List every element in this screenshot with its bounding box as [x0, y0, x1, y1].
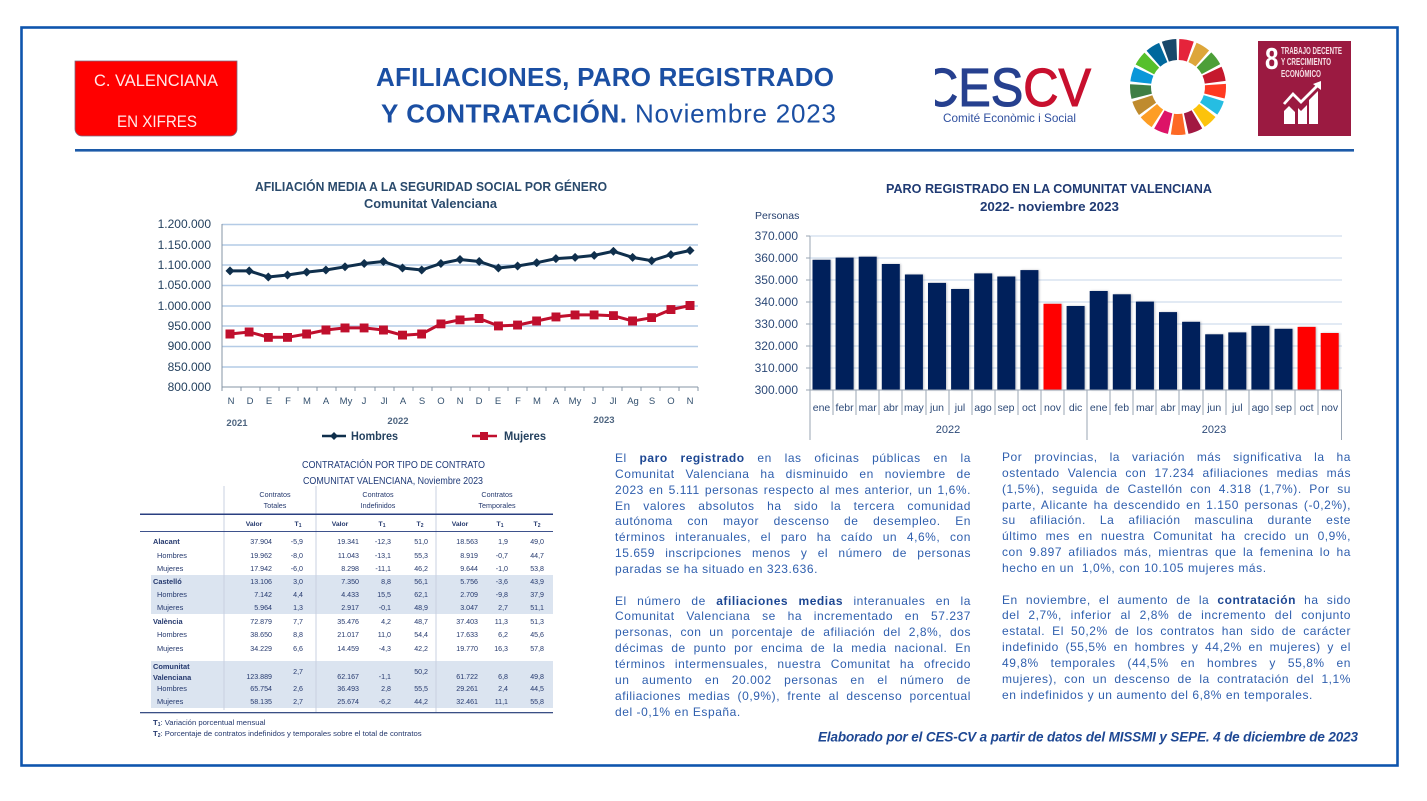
table values: 123.889 [246, 673, 272, 681]
year labels [226, 415, 615, 429]
legend [322, 429, 546, 443]
shaded rows [151, 575, 553, 614]
y axis labels: 850.000 [168, 360, 211, 374]
x axis labels: O [437, 396, 445, 407]
x axis labels: abr [883, 402, 899, 414]
row labels: Hombres [157, 630, 187, 639]
x axis labels: N [457, 396, 464, 407]
text block: paro y afiliaciones: El número de afiliaciones medias interanuales en la [615, 594, 971, 608]
row labels: Hombres [157, 684, 187, 693]
table values: 2,6 [293, 685, 303, 693]
y axis labels: 350.000 [755, 273, 798, 287]
column headers: Totales [264, 501, 287, 510]
table: contratación: T [497, 521, 501, 528]
table values: 44,2 [414, 698, 428, 706]
x axis labels: jul [1231, 402, 1243, 414]
row labels [153, 537, 192, 706]
badge: C. Valenciana en xifres: C. VALENCIANA [94, 71, 219, 90]
table values: 2,7 [293, 698, 303, 706]
bars [812, 257, 1339, 390]
x axis labels: My [569, 396, 582, 407]
logo: CES-CV: CESCV [923, 58, 1091, 118]
text block: provincias y contratación: su afiliación. La afiliación masculina durante este [1002, 513, 1351, 527]
table values: -0,7 [496, 552, 508, 560]
table values: -13,1 [375, 552, 391, 560]
icon: SDG 8 tile: ECONÓMICO [1281, 67, 1321, 80]
table values: 61.722 [456, 673, 478, 681]
x axis labels: M [303, 396, 311, 407]
x axis labels: My [340, 396, 353, 407]
table values: -1,0 [496, 565, 508, 573]
x axis labels: sep [998, 402, 1015, 414]
header divider [75, 149, 1354, 152]
y axis labels: 310.000 [755, 361, 798, 375]
text block: provincias y contratación: en indefinidos y un aumento del 6,8% en temporales. [1002, 688, 1313, 702]
table values: -3,6 [496, 578, 508, 586]
title: AFILIACIONES, PARO REGISTRADO [376, 62, 834, 92]
x axis labels: D [476, 396, 483, 407]
table values: 54,4 [414, 631, 428, 639]
x axis labels: F [285, 396, 291, 407]
table: contratación: 1 [383, 523, 386, 529]
text block: paro y afiliaciones: En valores absolutos ha sido la tercera comunidad [615, 499, 971, 513]
table values: 14.459 [337, 645, 359, 653]
table values: -6,2 [379, 698, 391, 706]
table values: 36.493 [337, 685, 359, 693]
text block: paro y afiliaciones: personas, con un porcentaje de afiliación del 2,8%, dos [615, 625, 971, 639]
table values: 8.919 [460, 552, 478, 560]
icon: SDG wheel [1125, 34, 1231, 140]
series: Mujeres [230, 306, 690, 337]
table values: 46,2 [414, 565, 428, 573]
x axis labels: M [533, 396, 541, 407]
column headers [259, 490, 516, 510]
table values: 25.674 [337, 698, 359, 706]
row labels: Hombres [157, 590, 187, 599]
text block: provincias y contratación: ostentado Valencia con 17.234 afiliaciones medias más [1002, 466, 1351, 480]
table values: 53,8 [530, 565, 544, 573]
row labels: Alacant [153, 537, 180, 546]
table values: 4.433 [341, 591, 359, 599]
table values: 48,9 [414, 604, 428, 612]
table values: 55,3 [414, 552, 428, 560]
chart title: PARO REGISTRADO EN LA COMUNITAT VALENCIANA [886, 181, 1213, 196]
x axis labels: F [515, 396, 521, 407]
x axis labels: nov [1321, 402, 1339, 414]
x axis labels: J [362, 396, 367, 407]
table footnotes [153, 718, 422, 739]
table values: 15,5 [377, 591, 391, 599]
text block: provincias y contratación: último mes en nuestra Comunitat ha crecido un 0,9%, [1002, 529, 1351, 543]
x axis labels: sep [1275, 402, 1292, 414]
table values: 6,6 [293, 645, 303, 653]
table values: 57,8 [530, 645, 544, 653]
table values [246, 538, 544, 706]
table values: 3,0 [293, 578, 303, 586]
table values: 35.476 [337, 618, 359, 626]
x axis labels: nov [1044, 402, 1062, 414]
text block: paro y afiliaciones: 2023 en 5.111 personas respecto al mes anterior, un 1,6%. [615, 483, 971, 497]
table values: 8,8 [381, 578, 391, 586]
x axis labels: Ag [627, 396, 639, 407]
table: contratación: Valor [452, 521, 469, 528]
column headers: Contratos [362, 490, 394, 499]
table footnotes: : Porcentaje de contratos indefinidos y temporales sobre el total de contratos [160, 729, 422, 738]
table values: -9,8 [496, 591, 508, 599]
table values: 51,0 [414, 538, 428, 546]
x axis labels: jul [954, 402, 965, 414]
row labels: Hombres [157, 551, 187, 560]
x axis labels: mar [859, 402, 877, 414]
title: Noviembre 2023 [635, 98, 836, 128]
table values: 11,0 [378, 631, 391, 639]
legend: Mujeres [504, 429, 546, 443]
text block: paro y afiliaciones [615, 451, 971, 718]
year labels: 2023 [1202, 424, 1226, 436]
logo: CES-CV: Comité Econòmic i Social [943, 111, 1076, 125]
table values: -6,0 [291, 565, 303, 573]
table footnotes: T [153, 729, 161, 739]
table values: 48,7 [414, 618, 428, 626]
table: contratación: T [534, 521, 538, 528]
text block: provincias y contratación: estatal. El 50,2% de los contratos han sido de carácter [1002, 624, 1351, 638]
y axis labels: 950.000 [168, 319, 211, 333]
column headers: Contratos [259, 490, 291, 499]
x axis labels: O [667, 396, 675, 407]
y axis labels: 330.000 [755, 317, 798, 331]
table values: 49,8 [530, 673, 544, 681]
table values: 17.942 [250, 565, 272, 573]
chart title: AFILIACIÓN MEDIA A LA SEGURIDAD SOCIAL POR GÉNERO [255, 179, 607, 194]
table: contratación: 2 [538, 523, 541, 529]
table values: -11,1 [375, 565, 391, 573]
table values: 38.650 [250, 631, 272, 639]
table values: 5.756 [460, 578, 478, 586]
x axis labels: oct [1300, 402, 1314, 414]
year labels [936, 424, 1226, 436]
chart title: 2022- noviembre 2023 [980, 199, 1119, 214]
table values: 56,1 [414, 578, 428, 586]
x axis labels: dic [1069, 402, 1082, 414]
table values: 7.350 [341, 578, 359, 586]
table values: 2.917 [341, 604, 359, 612]
x axis labels: abr [1160, 402, 1176, 414]
table values: -5,9 [291, 538, 303, 546]
y axis labels: 320.000 [755, 339, 798, 353]
table values: 44,5 [530, 685, 544, 693]
table values: 2.709 [460, 591, 478, 599]
table footnotes: 2 [158, 733, 161, 739]
y axis labels: 1.000.000 [158, 299, 211, 313]
text block: paro y afiliaciones: términos intermensuales, nuestra Comunitat ha ofrecido [615, 657, 971, 671]
text block: provincias y contratación: (1,5%), seguida de Castellón con 4.318 (1,7%). Por su [1002, 482, 1351, 496]
table: contratación [140, 458, 553, 739]
table values: 21.017 [337, 631, 359, 639]
x axis labels: oct [1022, 402, 1036, 414]
table values: -4,3 [379, 645, 391, 653]
x axis labels: may [1181, 402, 1202, 414]
year labels: 2023 [593, 415, 615, 426]
table values: 2,4 [498, 685, 508, 693]
text block: paro y afiliaciones: del -0,1% en España. [615, 704, 741, 718]
text block: provincias y contratación [1002, 450, 1351, 702]
text block: paro y afiliaciones: décimas de punto por encima de la media nacional. En [615, 641, 971, 655]
table values: 34.229 [250, 645, 272, 653]
y axis labels: 340.000 [755, 295, 798, 309]
x axis labels: N [687, 396, 694, 407]
table values: 50,2 [414, 668, 428, 676]
legend: Hombres [351, 429, 398, 443]
table values: 62.167 [337, 673, 359, 681]
y axis labels: 300.000 [755, 383, 798, 397]
year labels: 2022 [936, 424, 960, 436]
column headers: Indefinidos [361, 501, 396, 510]
table values: 4,4 [293, 591, 303, 599]
table values: 19.962 [250, 552, 272, 560]
table values: 11,3 [495, 618, 508, 626]
table values: 6,8 [498, 673, 508, 681]
table values: 29.261 [456, 685, 478, 693]
table values: 65.754 [250, 685, 272, 693]
x axis labels: S [649, 396, 655, 407]
table values: 2,7 [293, 668, 303, 676]
table values: 9.644 [460, 565, 478, 573]
bar chart: paro registrado [755, 181, 1342, 440]
title: Y CONTRATACIÓN. [381, 98, 627, 128]
table title: CONTRATACIÓN POR TIPO DE CONTRATO [302, 458, 485, 471]
text block: provincias y contratación: En noviembre, el aumento de la contratación ha sido [1002, 593, 1351, 607]
row labels: Mujeres [157, 564, 184, 573]
table values: 18.563 [456, 538, 478, 546]
table: contratación: 1 [299, 523, 302, 529]
table values: 2,7 [498, 604, 508, 612]
text block: provincias y contratación: del 2,7%, inferior al 2,8% de incremento del conjunto [1002, 608, 1351, 622]
series: Hombres [230, 250, 690, 277]
x axis labels: E [495, 396, 501, 407]
text block: paro y afiliaciones: autónoma con mayor descenso de desempleo. En [615, 514, 971, 528]
table values: 55,5 [414, 685, 428, 693]
line chart: afiliación media [158, 179, 698, 443]
x axis labels: A [323, 396, 330, 407]
text block: paro y afiliaciones: Comunitat Valenciana se ha incrementado en 57.237 [615, 609, 971, 623]
table title: COMUNITAT VALENCIANA, Noviembre 2023 [303, 475, 483, 487]
table values: 5.964 [254, 604, 272, 612]
table values: 8,8 [293, 631, 303, 639]
table title [302, 458, 485, 487]
table: contratación: 2 [421, 523, 424, 529]
row labels: Castelló [153, 577, 182, 586]
table values: -8,0 [291, 552, 303, 560]
chart title: Comunitat Valenciana [364, 197, 498, 211]
x axis labels [813, 402, 1339, 414]
table values: 19.770 [456, 645, 478, 653]
source note: Elaborado por el CES-CV a partir de datos del MISSMI y SEPE. 4 de diciembre de 2023 [818, 730, 1358, 744]
x axis labels: Jl [610, 396, 616, 407]
icon: SDG 8 tile [1258, 41, 1351, 136]
table footnotes: T [153, 718, 161, 728]
table values: 49,0 [530, 538, 544, 546]
table values: 6,2 [498, 631, 508, 639]
text block: provincias y contratación: con 9.897 afiliados más, mientras que la femenina lo ha [1002, 545, 1351, 559]
table values: 44,7 [530, 552, 544, 560]
x axis labels: N [228, 396, 235, 407]
table values: 11,1 [495, 698, 508, 706]
table values: 7.142 [254, 591, 272, 599]
x axis labels: ago [974, 402, 992, 414]
table: contratación: Valor [246, 521, 263, 528]
table values: -0,1 [379, 604, 391, 612]
table values: 37,9 [530, 591, 544, 599]
x axis labels: ago [1252, 402, 1269, 414]
row labels: Comunitat [153, 662, 190, 671]
table: contratación: T [379, 521, 383, 528]
column headers: Temporales [478, 501, 516, 510]
table values: 51,3 [530, 618, 544, 626]
table values: 58.135 [250, 698, 272, 706]
table: contratación: T [417, 521, 421, 528]
x axis labels: ene [1090, 402, 1108, 414]
column headers: Contratos [481, 490, 513, 499]
table footnotes: : Variación porcentual mensual [160, 718, 266, 727]
icon: SDG 8 tile: 8 [1265, 41, 1278, 76]
y axis labels [755, 229, 798, 397]
text block: paro y afiliaciones: un aumento en 20.002 personas en el número de [615, 673, 971, 687]
y axis labels: 900.000 [168, 339, 211, 353]
text block: provincias y contratación: indefinido (55,5% en hombres y 44,2% en mujeres) y el [1002, 640, 1351, 654]
y axis labels: 1.050.000 [158, 278, 211, 292]
x axis labels: febr [836, 402, 854, 414]
row labels: Valenciana [153, 673, 192, 682]
badge: C. Valenciana en xifres [75, 61, 237, 136]
table values: 4,2 [381, 618, 391, 626]
x axis labels: mar [1136, 402, 1155, 414]
chart title [886, 181, 1213, 214]
row labels: Mujeres [157, 644, 184, 653]
table values: 55,8 [530, 698, 544, 706]
row labels: València [153, 617, 183, 626]
x axis labels: A [553, 396, 560, 407]
table values: 37.904 [250, 538, 272, 546]
table footnotes: 1 [158, 722, 161, 728]
y axis labels: 360.000 [755, 251, 798, 265]
x axis labels: A [400, 396, 407, 407]
table values: 7,7 [293, 618, 303, 626]
text block: paro y afiliaciones: afiliaciones medias (0,9%), frente al descenso porcentual [615, 689, 971, 703]
table values: 16,3 [494, 645, 508, 653]
y axis labels: 1.200.000 [158, 217, 211, 231]
year labels: 2022 [387, 416, 409, 427]
row labels: Mujeres [157, 603, 184, 612]
year labels: 2021 [226, 418, 248, 429]
table values: 1,3 [293, 604, 303, 612]
table: contratación: Valor [332, 521, 349, 528]
table values: -1,1 [379, 673, 391, 681]
y axis labels: 370.000 [755, 229, 798, 243]
x axis labels: E [266, 396, 272, 407]
text block: paro y afiliaciones: 15.659 inscripciones menos y el número de personas [615, 546, 971, 560]
text block: paro y afiliaciones: Comunitat Valenciana ha disminuido en noviembre de [615, 467, 971, 481]
table values: 13.106 [250, 578, 272, 586]
text block: provincias y contratación: Por provincias, la variación más significativa la ha [1002, 450, 1351, 464]
x axis labels: S [419, 396, 425, 407]
table values: 32.461 [456, 698, 478, 706]
unit label: Personas [755, 210, 799, 222]
table values: 72.879 [250, 618, 272, 626]
x axis labels: J [592, 396, 597, 407]
table values: 45,6 [530, 631, 544, 639]
table: contratación: T [295, 521, 299, 528]
text block: provincias y contratación: hecho en un 1,0%, con 10.105 mujeres más. [1002, 561, 1267, 575]
table values: 42,2 [414, 645, 428, 653]
icon: SDG 8 tile: TRABAJO DECENTE [1281, 46, 1342, 57]
table values: 2,8 [381, 685, 391, 693]
table: contratación: 1 [501, 523, 504, 529]
table values: 17.633 [456, 631, 478, 639]
table values: 19.341 [337, 538, 359, 546]
y axis labels: 1.150.000 [158, 238, 211, 252]
x axis labels: jun [929, 402, 944, 414]
table values: 43,9 [530, 578, 544, 586]
x axis labels: jun [1206, 402, 1221, 414]
y axis labels [158, 217, 211, 394]
table values: 1,9 [498, 538, 508, 546]
table values: 51,1 [530, 604, 544, 612]
text block: provincias y contratación: mujeres), con un descenso de la contratación del 1,1% [1002, 672, 1351, 686]
table values: 37.403 [456, 618, 478, 626]
text block: paro y afiliaciones: paradas se ha situado en 323.636. [615, 562, 818, 576]
table values: 3.047 [460, 604, 478, 612]
text block: provincias y contratación: parte, Alicante ha descendido en 1.150 personas (-0,2%), [1002, 498, 1351, 512]
row labels: Mujeres [157, 697, 184, 706]
x axis labels: Jl [381, 396, 387, 407]
text block: paro y afiliaciones: términos interanuales, el paro ha caído un 4,6%, con [615, 530, 971, 544]
y axis labels: 800.000 [168, 380, 211, 394]
text block: paro y afiliaciones: El paro registrado en las oficinas públicas en la [615, 451, 971, 465]
y axis labels: 1.100.000 [158, 258, 211, 272]
table values: -12,3 [375, 538, 391, 546]
badge: C. Valenciana en xifres: EN XIFRES [117, 112, 197, 131]
x axis labels: feb [1114, 402, 1129, 414]
x axis labels: may [904, 402, 925, 414]
table values: 62,1 [414, 591, 428, 599]
x axis labels: D [247, 396, 254, 407]
chart title [255, 179, 607, 211]
title [376, 62, 836, 128]
table values: 8.298 [341, 565, 359, 573]
table values: 11.043 [338, 552, 359, 560]
x axis labels [228, 396, 694, 407]
x axis labels: ene [813, 402, 830, 414]
icon: SDG 8 tile: Y CRECIMIENTO [1281, 57, 1331, 68]
text block: provincias y contratación: 49,8% temporales (44,5% en hombres y 55,8% en [1002, 656, 1351, 670]
